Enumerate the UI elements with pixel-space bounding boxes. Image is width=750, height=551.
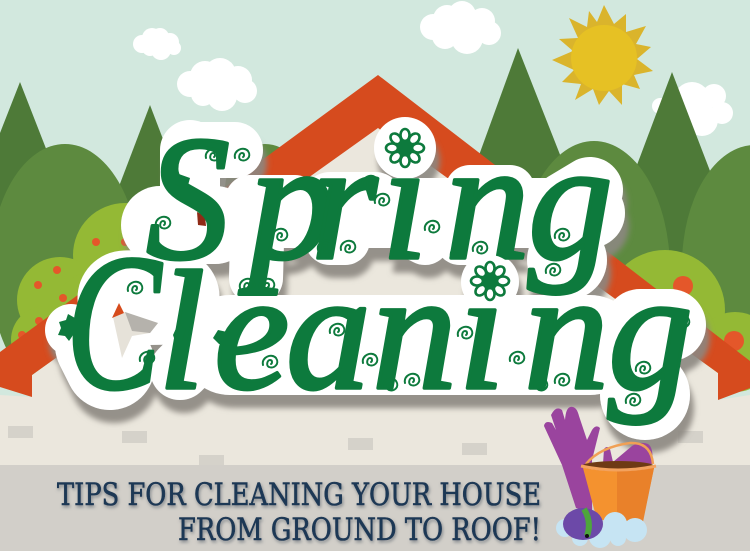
flower: bottom [471,262,509,300]
subtitle line 2: FROM GROUND TO ROOF! [178,512,541,548]
cover for letter dots [377,120,516,307]
fruit dots left [18,238,129,339]
word: Spring: Spring [146,99,613,297]
tree: second left [110,105,190,210]
wall bricks [8,426,703,466]
sun [552,5,653,105]
subtitle [57,477,541,548]
gap inside letter S [197,212,206,226]
sticker backing [71,148,670,395]
bush: light green left [11,203,177,374]
icon: sponge [563,508,603,540]
cloud: small left [133,28,181,60]
tree: centre right [470,48,570,180]
cloud: middle left [177,58,257,111]
bush: light green right [605,250,750,392]
bush: small behind title [225,144,305,236]
swirls [128,149,689,405]
fruit dots right [673,276,744,351]
word: Cleaning: Cleaning [66,215,693,431]
bush: dark green left [0,144,140,396]
tree: right [620,72,725,260]
icon: bucket [581,443,656,522]
cloud: top centre [420,1,501,54]
subtitle line 1: TIPS FOR CLEANING YOUR HOUSE [57,477,541,513]
icon: soap bubbles [556,512,647,548]
flower: top [386,129,424,167]
title sticker [58,99,693,431]
icon: glove [544,407,600,512]
icon: glove in bucket [603,443,652,464]
bush: far right [682,145,750,385]
tree: far left [0,82,70,260]
bush: dark green right [518,141,670,399]
leaf flourishes [58,173,232,346]
cloud: behind right tree [652,82,733,136]
house wall [0,125,750,470]
gap inside letter C [112,303,158,358]
roof [0,75,750,400]
ground strip [0,465,750,551]
